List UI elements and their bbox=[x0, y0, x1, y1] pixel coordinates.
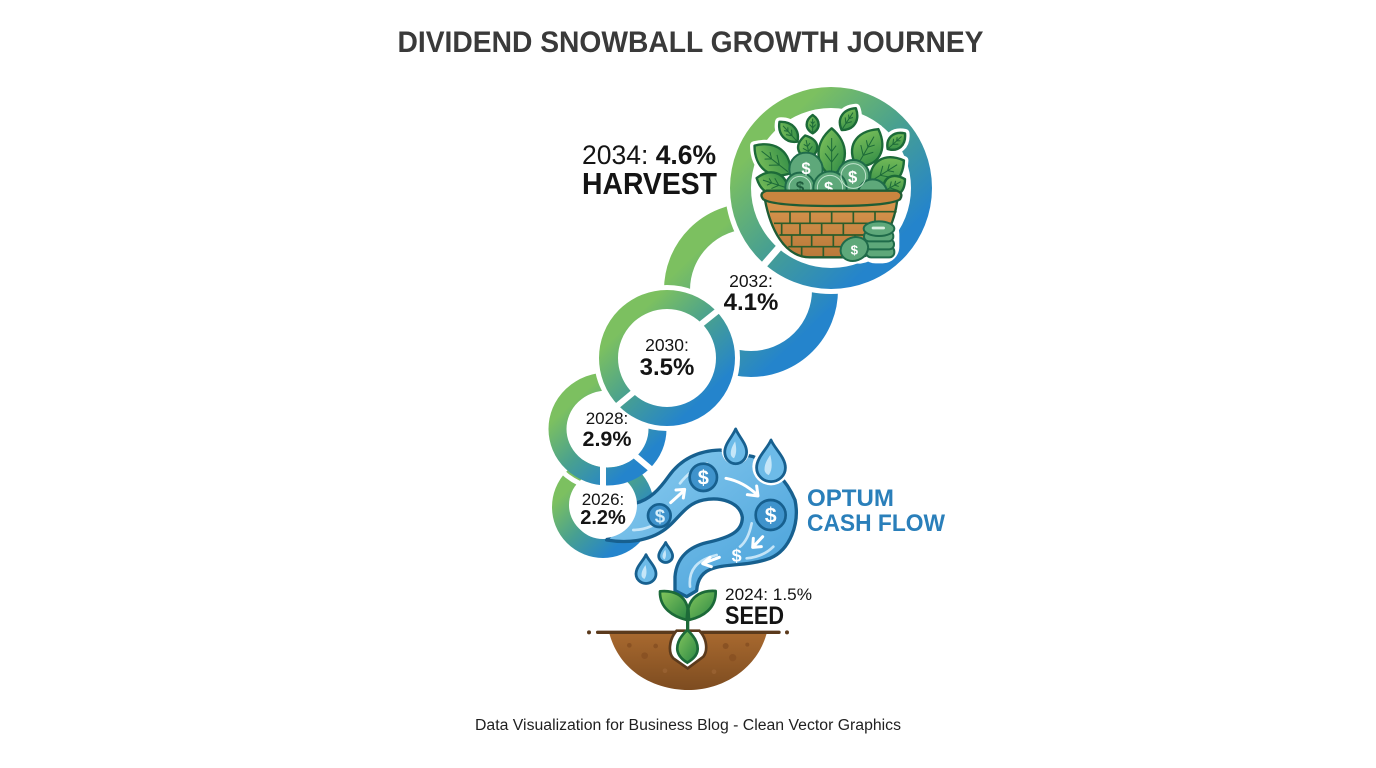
label: 2024 seed: 2024: 1.5% bbox=[725, 585, 812, 604]
label: 2028: 2.9% bbox=[582, 427, 632, 451]
icon: water drops bbox=[636, 429, 790, 583]
label: 2026: 2.2% bbox=[580, 507, 626, 529]
label: 2034 harvest: HARVEST bbox=[582, 166, 717, 201]
icon: basket of leaves and coins: $ bbox=[796, 180, 805, 197]
ring: 2030 bbox=[594, 285, 740, 431]
icon: basket of leaves and coins: $ bbox=[801, 159, 811, 178]
label: 2030: 3.5% bbox=[640, 354, 694, 381]
coins bbox=[648, 464, 786, 530]
label: 2032: 4.1% bbox=[724, 289, 778, 316]
water stream: cash flow: $ bbox=[655, 506, 666, 527]
icon: basket of leaves and coins bbox=[746, 104, 911, 265]
footer caption: Data Visualization for Business Blog - Clean Vector Graphics bbox=[475, 717, 901, 734]
label: 2032 bbox=[724, 271, 778, 316]
label: 2024 seed bbox=[725, 585, 812, 630]
label: 2030 bbox=[640, 335, 694, 381]
label: 2030: 2030: bbox=[645, 335, 689, 355]
arrows bbox=[671, 478, 763, 567]
label: 2024 seed: SEED bbox=[725, 602, 784, 630]
label: 2026 bbox=[580, 490, 626, 529]
water stream: cash flow: $ bbox=[732, 545, 742, 565]
label: optum cash flow: CASH FLOW bbox=[807, 510, 946, 537]
label: 2034 harvest bbox=[582, 140, 717, 201]
label: 2028 bbox=[582, 409, 632, 451]
ring: 2032 bbox=[677, 216, 825, 364]
title: DIVIDEND SNOWBALL GROWTH JOURNEY bbox=[398, 26, 984, 59]
water stream: cash flow: $ bbox=[765, 504, 777, 528]
water stream: cash flow bbox=[607, 450, 796, 597]
water stream: cash flow: $ bbox=[698, 468, 709, 490]
ring: 2026 inner disc bbox=[569, 472, 637, 538]
label: 2032: 2032: bbox=[729, 271, 773, 291]
label: optum cash flow bbox=[807, 485, 946, 537]
ring: 2028 bbox=[553, 382, 658, 489]
ring: 2026 bbox=[562, 466, 644, 548]
label: 2034 harvest: 2034: 4.6% bbox=[582, 140, 716, 170]
label: 2028: 2028: bbox=[586, 409, 628, 428]
label: 2026: 2026: bbox=[582, 490, 624, 509]
icon: basket of leaves and coins: $ bbox=[824, 178, 834, 197]
ring: 2034 harvest bbox=[725, 82, 937, 294]
icon: basket of leaves and coins: $ bbox=[848, 168, 858, 187]
icon: soil with sprout bbox=[587, 591, 789, 690]
label: optum cash flow: OPTUM bbox=[807, 485, 894, 512]
icon: basket of leaves and coins: $ bbox=[851, 243, 859, 258]
